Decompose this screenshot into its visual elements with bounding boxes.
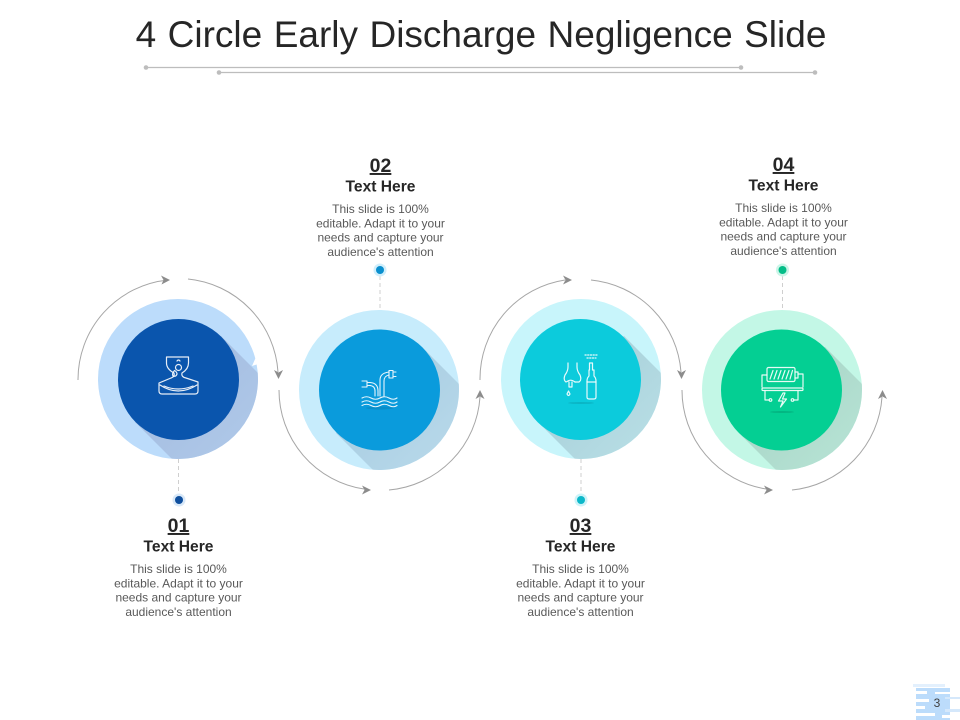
icon: nose and nasal spray: [564, 355, 598, 404]
text block: step 01: audience's attention: [125, 605, 232, 619]
title underline: [144, 65, 817, 75]
step 02 circle: [299, 310, 459, 470]
page number badge: [913, 684, 960, 720]
icon: neck and tears: [159, 357, 198, 394]
step 01 circle: [98, 299, 258, 459]
text block: step 02: [316, 155, 445, 259]
connector: step 03: [574, 459, 588, 506]
text block: step 03: needs and capture your: [517, 590, 644, 604]
icon: pipes over water: [362, 370, 397, 410]
text block: step 02: This slide is 100%: [332, 202, 429, 216]
icon: battery and circuit: [762, 368, 803, 413]
text block: step 03: Text Here: [546, 538, 616, 556]
text block: step 01: This slide is 100%: [130, 562, 227, 576]
text block: step 03: [516, 515, 645, 619]
text block: step 02: 02: [370, 155, 391, 177]
text block: step 02: audience's attention: [327, 245, 434, 259]
connector: step 02: [374, 264, 386, 310]
text block: step 02: needs and capture your: [317, 230, 444, 244]
text block: step 01: 01: [168, 515, 189, 537]
text block: step 02: Text Here: [346, 178, 416, 196]
title: 4 Circle Early Discharge Negligence Slide: [136, 14, 826, 55]
text block: step 04: [719, 154, 848, 258]
text block: step 04: This slide is 100%: [735, 201, 832, 215]
text block: step 01: [114, 515, 243, 619]
text block: step 03: audience's attention: [527, 605, 634, 619]
step 04 circle: [702, 310, 862, 470]
text block: step 03: editable. Adapt it to your: [516, 576, 645, 590]
text block: step 03: 03: [570, 515, 591, 537]
text block: step 04: 04: [773, 154, 794, 176]
step 03 circle: [501, 299, 661, 459]
text block: step 01: editable. Adapt it to your: [114, 576, 243, 590]
text block: step 04: Text Here: [749, 178, 819, 194]
text block: step 04: editable. Adapt it to your: [719, 216, 848, 230]
flow arrows: [78, 276, 887, 494]
text block: step 04: needs and capture your: [720, 230, 847, 244]
page number badge: 3: [934, 696, 941, 710]
text block: step 01: needs and capture your: [115, 590, 242, 604]
text block: step 04: audience's attention: [730, 244, 837, 258]
connector: step 04: [776, 264, 789, 310]
small white glyph fragment: [252, 357, 258, 366]
text block: step 03: This slide is 100%: [532, 562, 629, 576]
connector: step 01: [172, 459, 186, 506]
text block: step 02: editable. Adapt it to your: [316, 216, 445, 230]
text block: step 01: Text Here: [144, 538, 214, 556]
